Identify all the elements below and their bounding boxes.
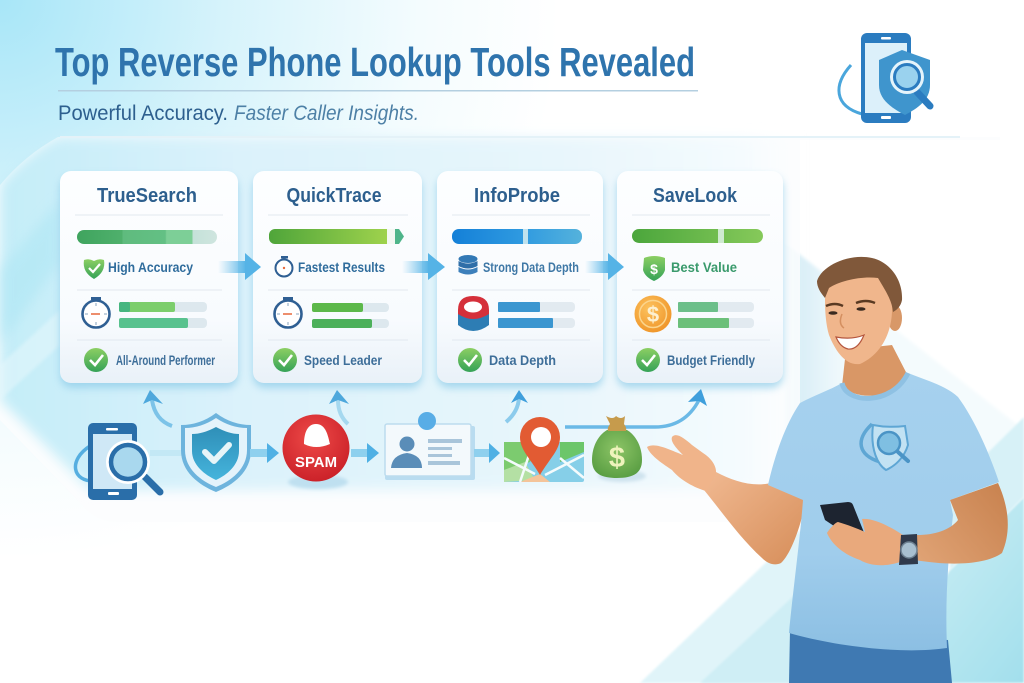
feature label: High Accuracy [108, 259, 193, 275]
arrow: QuickTrace to InfoProbe [402, 253, 445, 280]
icon: check badge [458, 348, 482, 372]
head [817, 257, 902, 364]
arrow: ID card to map [474, 443, 500, 463]
holding hand [827, 519, 903, 565]
verdict label: Speed Leader [304, 352, 382, 368]
verdict label: Data Depth [489, 352, 556, 368]
verdict label: Budget Friendly [667, 352, 755, 368]
metric bars [312, 303, 389, 328]
arrow: shield to spam [250, 443, 279, 463]
t-shirt logo [861, 424, 908, 470]
icon: green shield [84, 259, 104, 279]
arrow: TrueSearch to QuickTrace [218, 253, 261, 280]
title: Top Reverse Phone Lookup Tools Revealed [55, 39, 695, 85]
icon: check badge [636, 348, 660, 372]
card name: QuickTrace [286, 185, 382, 207]
t-shirt [768, 373, 999, 650]
rating bar [269, 229, 404, 244]
metric bars [678, 302, 754, 328]
icon: dollar shield [643, 256, 665, 281]
subtitle: Faster Caller Insights. [234, 102, 419, 125]
card: InfoProbe [437, 171, 603, 388]
arrow: InfoProbe to SaveLook [585, 253, 624, 280]
feature label: Fastest Results [298, 259, 385, 275]
presenter's right arm and hand [647, 435, 806, 564]
feature label: Best Value [671, 259, 737, 275]
subtitle: Powerful Accuracy. [58, 102, 228, 125]
eyes and brows [826, 301, 875, 306]
arrow: up to QuickTrace [329, 390, 349, 424]
arrow: up to InfoProbe [506, 390, 528, 422]
rating bar [632, 229, 763, 243]
icon: security shield with check [181, 413, 251, 492]
rating bar [77, 230, 217, 244]
card name: InfoProbe [474, 185, 560, 207]
icon: map with location pin [504, 417, 584, 482]
icon: phone with magnifier [75, 423, 160, 500]
icon: stopwatch [274, 297, 302, 328]
icon: stopwatch [82, 297, 110, 328]
card: TrueSearch [60, 171, 238, 388]
hair [817, 257, 902, 312]
metric bars [119, 302, 207, 328]
icon: blue database [458, 255, 478, 274]
background panel behind the cards [0, 136, 1000, 522]
card name: SaveLook [653, 185, 738, 207]
icon: spam alert: SPAM [295, 455, 337, 471]
card: QuickTrace [253, 171, 422, 388]
icon: check badge [84, 348, 108, 372]
subtitle [58, 102, 419, 125]
arrow: up to SaveLook [565, 389, 707, 427]
icon: ID profile card [385, 412, 475, 480]
connector line: phone to shield [150, 450, 184, 456]
presenter figure [647, 257, 1008, 683]
card name: TrueSearch [97, 185, 197, 207]
icon: small stopwatch [276, 256, 292, 276]
icon: check badge [273, 348, 297, 372]
icon: money bag [592, 416, 646, 482]
icon: red and blue database [458, 296, 489, 331]
icon: money bag: $ [609, 442, 625, 474]
verdict label: All-Around Performer [116, 353, 216, 368]
icon: gold coin: $ [647, 302, 659, 327]
card: SaveLook [617, 171, 783, 388]
metric bars [498, 302, 575, 328]
icon: spam alert [282, 414, 350, 489]
far arm [915, 483, 1008, 564]
feature label: Strong Data Depth [483, 260, 579, 275]
jeans [789, 630, 952, 683]
smile [836, 335, 864, 349]
wristwatch [899, 534, 918, 565]
rating bar [452, 229, 582, 244]
icon: gold coin [634, 296, 672, 332]
t-shirt collar [842, 373, 908, 398]
icon: phone with shield and magnifier logo [839, 33, 930, 123]
neck [842, 345, 908, 396]
phone in hand [820, 502, 865, 535]
arrow: spam to ID card [351, 443, 379, 463]
nose [840, 314, 844, 328]
icon: dollar shield: $ [650, 261, 658, 277]
title underline [58, 90, 698, 92]
arrow: up to TrueSearch [143, 390, 172, 426]
